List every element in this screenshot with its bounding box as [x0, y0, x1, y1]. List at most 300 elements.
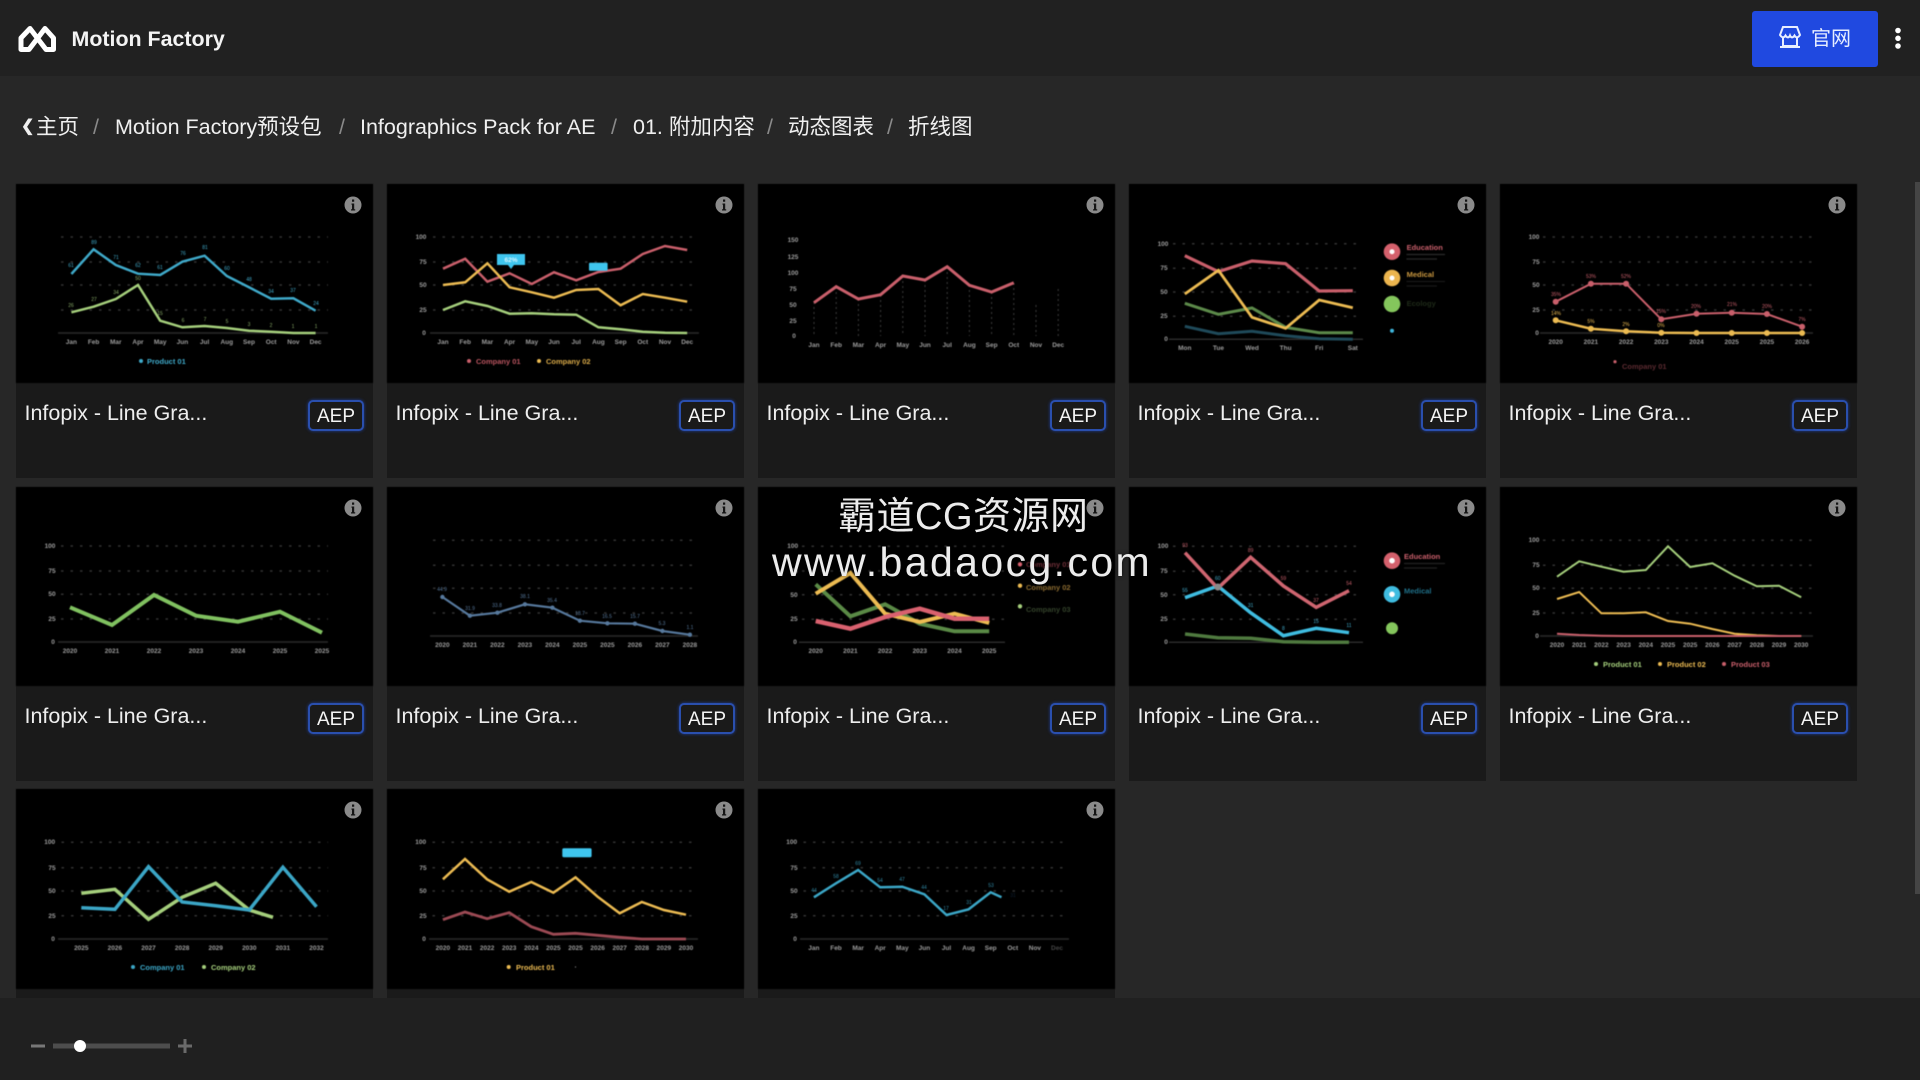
- line chart: single blue series: 50: [790, 888, 798, 895]
- line chart: single green series: 50: [48, 591, 56, 598]
- line chart: product 01: 37: [290, 288, 296, 294]
- line chart: product 01: Dec: [310, 339, 322, 346]
- icon: info: [1458, 196, 1474, 214]
- breadcrumb: 01. 附加内容: [633, 115, 755, 139]
- line chart: single blue series: Feb: [830, 945, 842, 952]
- line chart: companies: [387, 184, 744, 383]
- line chart: company blue and green: 75: [48, 865, 56, 872]
- badge: AEP: AEP: [1059, 406, 1097, 427]
- line chart: companies: 100: [416, 234, 427, 241]
- line chart: single blue series: Dec: [1051, 945, 1063, 952]
- line chart: companies: Feb: [459, 339, 471, 346]
- breadcrumb: Motion Factory预设包: [115, 115, 322, 139]
- line chart: product 01: 7: [204, 317, 207, 323]
- line chart: product yellow and maroon: 2026: [590, 945, 605, 952]
- line chart: education and medical: 54: [1346, 581, 1352, 587]
- line chart: single red series: Aug: [963, 342, 976, 349]
- line chart: weekly with side legend: Education: [1407, 243, 1443, 252]
- line chart: product 01: Jan: [66, 339, 77, 346]
- card 8: [758, 487, 1115, 781]
- line chart: product 01: Aug: [220, 339, 233, 346]
- line chart: product yellow and maroon: 25: [419, 913, 427, 920]
- line chart: education and medical: 93: [1182, 543, 1188, 549]
- line chart: single green series: 2022: [147, 648, 162, 655]
- line chart: single blue series: 69: [855, 861, 861, 867]
- line chart: company blue and green: 2029: [208, 945, 223, 952]
- line chart: companies: 0: [422, 330, 426, 337]
- line chart: weekly with side legend: 25: [1160, 313, 1168, 320]
- icon: info: [344, 802, 362, 818]
- line chart: single green series: 2020: [63, 648, 78, 655]
- line chart: three companies: 100: [787, 543, 799, 550]
- line chart: weekly with side legend: Sat: [1348, 345, 1359, 352]
- line chart: three products: 2020: [1550, 642, 1565, 649]
- line chart: single red series: 125: [788, 254, 799, 261]
- badge: AEP: AEP: [317, 709, 355, 730]
- line chart: product yellow and maroon: Product 01: [516, 963, 555, 972]
- card 7: [387, 487, 744, 781]
- line chart: single green series: 2025: [273, 648, 288, 655]
- line chart: product yellow and maroon: 50: [419, 888, 427, 895]
- card 10: [1500, 487, 1857, 781]
- line chart: single slate series: 31.9: [465, 606, 475, 612]
- line chart: companies: Dec: [681, 339, 694, 346]
- breadcrumb: /: [767, 115, 773, 139]
- line chart: single red series: Jun: [919, 342, 931, 349]
- badge: AEP: AEP: [1801, 406, 1839, 427]
- line chart: company blue and green: 2028: [175, 945, 190, 952]
- icon: info: [1458, 500, 1474, 516]
- line chart: education and medical: 31: [1248, 603, 1254, 609]
- line chart: yearly with markers: 20%: [1691, 304, 1702, 310]
- breadcrumb: /: [887, 115, 893, 139]
- line chart: three products: 2024: [1639, 642, 1653, 649]
- line chart: single green series: 2021: [105, 648, 120, 655]
- badge: AEP: [308, 703, 364, 734]
- line chart: weekly with side legend: 0: [1164, 336, 1168, 343]
- line chart: product 01: 3: [248, 322, 251, 328]
- line chart: single green series: 75: [48, 568, 56, 575]
- line chart: single slate series: 33.8: [492, 603, 502, 609]
- line chart: single red series: 150: [788, 237, 799, 244]
- line chart: product yellow and maroon: [387, 789, 744, 989]
- line chart: single slate series: 2022: [490, 642, 505, 649]
- card 3: [758, 184, 1115, 478]
- line chart: product 01: 50: [135, 276, 141, 282]
- line chart: weekly with side legend: Fri: [1315, 345, 1324, 352]
- line chart: yearly with markers: 53%: [1586, 274, 1597, 280]
- card 12: [387, 789, 744, 1080]
- line chart: single blue series: Aug: [962, 945, 975, 952]
- line chart: yearly with markers: 35%: [1551, 292, 1562, 298]
- line chart: company blue and green: 2031: [276, 945, 291, 952]
- line chart: single green series: 2024: [231, 648, 246, 655]
- line chart: three products: Product 02: [1667, 660, 1706, 669]
- line chart: single green series: 2025: [315, 648, 330, 655]
- line chart: three companies: Company 03: [1026, 605, 1071, 614]
- line chart: three companies: 2020: [808, 648, 823, 655]
- line chart: education and medical: 100: [1158, 543, 1169, 550]
- line chart: yearly with markers: 2026: [1795, 339, 1810, 346]
- breadcrumb: ❮: [21, 118, 34, 135]
- line chart: single blue series: Apr: [875, 945, 886, 952]
- card title: Infopix - Line Gra...: [1138, 704, 1320, 728]
- line chart: product 01: 1: [315, 324, 318, 330]
- line chart: single blue series: 58: [833, 874, 839, 880]
- watermark: [772, 496, 1152, 585]
- line chart: education and medical: 50: [1160, 592, 1168, 599]
- card 5: [1500, 184, 1857, 478]
- line chart: single blue series: Jan: [808, 945, 820, 952]
- card title: Infopix - Line Gra...: [24, 704, 207, 728]
- line chart: yearly with markers: 0: [1535, 330, 1539, 337]
- line chart: company blue and green: 100: [44, 839, 56, 846]
- line chart: single red series: Dec: [1052, 342, 1065, 349]
- line chart: single red series: 0: [792, 333, 796, 340]
- line chart: education and medical: 0: [1164, 639, 1168, 646]
- line chart: three companies: [758, 487, 1115, 686]
- line chart: product 01: Sep: [243, 339, 255, 346]
- line chart: yearly with markers: 2023: [1654, 339, 1669, 346]
- line chart: education and medical: 55: [1182, 588, 1188, 594]
- line chart: weekly with side legend: Wed: [1245, 345, 1259, 352]
- brand name: Motion Factory: [72, 27, 225, 51]
- line chart: single blue series: 47: [899, 877, 905, 883]
- line chart: product 01: 15: [157, 311, 163, 317]
- line chart: three products: 2027: [1727, 642, 1742, 649]
- line chart: three products: Product 03: [1731, 660, 1770, 669]
- icon: store: [1778, 26, 1802, 48]
- line chart: yearly with markers: 14%: [1551, 311, 1562, 317]
- line chart: weekly with side legend: 75: [1160, 265, 1168, 272]
- icon: info: [1086, 802, 1104, 818]
- line chart: weekly with side legend: [1129, 184, 1486, 383]
- line chart: single red series: May: [896, 342, 910, 349]
- line chart: single blue series: Jul: [942, 945, 951, 952]
- icon: info: [716, 500, 732, 516]
- line chart: companies: Oct: [637, 339, 649, 346]
- line chart: three products: 75: [1532, 562, 1540, 569]
- badge: AEP: AEP: [688, 406, 726, 427]
- line chart: company blue and green: 2030: [242, 945, 257, 952]
- card 9: [1129, 487, 1486, 781]
- line chart: single slate series: 38.1: [520, 594, 530, 600]
- line chart: yearly with markers: 2022: [1619, 339, 1634, 346]
- line chart: three companies: 0: [793, 639, 797, 646]
- line chart: three companies: 2024: [947, 648, 962, 655]
- badge: AEP: AEP: [688, 709, 726, 730]
- line chart: yearly with markers: 52%: [1621, 274, 1632, 280]
- line chart: product 01: [16, 184, 373, 383]
- card title: Infopix - Line Gra...: [1508, 401, 1691, 425]
- line chart: single red series: [758, 184, 1115, 383]
- line chart: education and medical: [1129, 487, 1486, 686]
- line chart: product yellow and maroon: 2024: [524, 945, 539, 952]
- line chart: single blue series: Oct: [1007, 945, 1019, 952]
- icon: info: [1828, 500, 1846, 516]
- line chart: product 01: 60: [224, 266, 230, 272]
- line chart: single red series: 50: [789, 302, 797, 309]
- line chart: education and medical: 11: [1346, 623, 1352, 629]
- line chart: single slate series: 5.3: [659, 621, 666, 627]
- card 6: [16, 487, 373, 781]
- line chart: education and medical: 15: [1313, 619, 1319, 625]
- line chart: education and medical: 89: [1248, 548, 1254, 554]
- line chart: product yellow and maroon: 100: [415, 839, 427, 846]
- line chart: three products: 2026: [1705, 642, 1720, 649]
- line chart: three companies: 2021: [843, 648, 858, 655]
- breadcrumb: /: [611, 115, 617, 139]
- line chart: three products: 2030: [1794, 642, 1809, 649]
- badge: AEP: [1792, 703, 1848, 734]
- line chart: three companies: 25: [790, 616, 798, 623]
- line chart: product yellow and maroon: 0: [422, 936, 426, 943]
- card 4: [1129, 184, 1486, 478]
- line chart: single blue series: Mar: [852, 945, 864, 952]
- line chart: single red series: Jan: [808, 342, 820, 349]
- line chart: product 01: 48: [246, 277, 252, 283]
- line chart: product 01: Nov: [287, 339, 300, 346]
- line chart: weekly with side legend: Medical: [1407, 270, 1434, 279]
- card 1: [16, 184, 373, 478]
- line chart: yearly with markers: 50: [1532, 282, 1540, 289]
- line chart: single green series: 100: [45, 543, 56, 550]
- line chart: three products: [1500, 487, 1857, 686]
- badge: AEP: [1792, 400, 1848, 431]
- breadcrumb: 动态图表: [788, 115, 874, 139]
- button: official site: 官网: [1811, 28, 1851, 50]
- line chart: company blue and green: 50: [48, 888, 56, 895]
- line chart: companies: Jul: [571, 339, 581, 346]
- line chart: single slate series: 2020: [435, 642, 450, 649]
- line chart: product yellow and maroon: 2025: [568, 945, 583, 952]
- line chart: single slate series: 2026: [628, 642, 643, 649]
- line chart: single blue series: [758, 789, 1115, 989]
- breadcrumb: /: [93, 115, 99, 139]
- line chart: single red series: Feb: [830, 342, 842, 349]
- line chart: single green series: 0: [51, 639, 55, 646]
- card 2: [387, 184, 744, 478]
- line chart: companies: Company 02: [546, 357, 591, 366]
- line chart: company blue and green: 0: [51, 936, 55, 943]
- icon: info: [716, 802, 732, 818]
- line chart: three companies: 50: [790, 592, 798, 599]
- line chart: companies: 50: [419, 282, 427, 289]
- line chart: single blue series: Jun: [919, 945, 930, 952]
- line chart: product yellow and maroon: 2027: [612, 945, 627, 952]
- card title: Infopix - Line Gra...: [1138, 401, 1320, 425]
- line chart: three products: 2021: [1572, 642, 1587, 649]
- badge: AEP: AEP: [1430, 406, 1468, 427]
- line chart: product 01: 62: [135, 263, 141, 269]
- line chart: three products: 2028: [1750, 642, 1764, 649]
- line chart: education and medical: 75: [1160, 568, 1168, 575]
- line chart: company blue and green: 2032: [309, 945, 324, 952]
- line chart: companies: Jun: [548, 339, 560, 346]
- line chart: education and medical: 37: [1313, 598, 1319, 604]
- line chart: single red series: 75: [789, 286, 797, 293]
- card title: Infopix - Line Gra...: [766, 401, 949, 425]
- line chart: single red series: 25: [789, 318, 797, 325]
- badge: AEP: AEP: [1801, 709, 1839, 730]
- watermark: www.badaocg.com: [772, 539, 1152, 585]
- line chart: company blue and green: 2027: [141, 945, 156, 952]
- card 13: [758, 789, 1115, 1080]
- line chart: yearly with markers: 25: [1532, 307, 1540, 314]
- line chart: single red series: Mar: [853, 342, 865, 349]
- line chart: companies: 75: [419, 259, 427, 266]
- line chart: product yellow and maroon: 2023: [502, 945, 517, 952]
- line chart: product 01: Feb: [88, 339, 99, 346]
- line chart: product 01: 71: [113, 255, 119, 261]
- line chart: education and medical: 59: [1281, 576, 1286, 582]
- line chart: product yellow and maroon: 2025: [546, 945, 561, 952]
- badge: AEP: AEP: [1430, 709, 1468, 730]
- line chart: three products: 25: [1532, 610, 1540, 617]
- line chart: single slate series: 18.7: [575, 611, 585, 617]
- line chart: product 01: 1: [292, 324, 295, 330]
- line chart: companies: Company 01: [476, 357, 521, 366]
- line chart: single blue series: 100: [786, 839, 798, 846]
- breadcrumb: Infographics Pack for AE: [360, 115, 595, 139]
- line chart: single slate series: 16.5: [602, 614, 612, 620]
- breadcrumb: /: [339, 115, 345, 139]
- badge: AEP: AEP: [317, 406, 355, 427]
- line chart: product 01: 24: [313, 301, 319, 307]
- line chart: product yellow and maroon: 2022: [480, 945, 495, 952]
- icon: info: [1086, 500, 1104, 516]
- line chart: yearly with markers: 75: [1532, 259, 1540, 266]
- card title: Infopix - Line Gra...: [396, 401, 578, 425]
- line chart: weekly with side legend: 50: [1160, 289, 1168, 296]
- line chart: weekly with side legend: Mon: [1178, 345, 1192, 352]
- line chart: single blue series: 25: [790, 913, 798, 920]
- line chart: company blue and green: 2026: [108, 945, 123, 952]
- line chart: yearly with markers: 15%: [1656, 309, 1667, 315]
- line chart: product yellow and maroon: 2028: [635, 945, 649, 952]
- card title: Infopix - Line Gra...: [766, 704, 949, 728]
- line chart: product 01: 61: [157, 265, 163, 271]
- line chart: single red series: Jul: [942, 342, 952, 349]
- icon: info: [716, 196, 732, 214]
- footer bar: [0, 998, 1920, 1080]
- line chart: yearly with markers: 20%: [1762, 304, 1773, 310]
- line chart: product 01: 5: [226, 319, 229, 325]
- line chart: yearly with markers: [1500, 184, 1857, 383]
- breadcrumb: [21, 115, 973, 139]
- line chart: weekly with side legend: 100: [1158, 241, 1169, 248]
- zoom slider: [31, 1039, 192, 1053]
- line chart: single slate series: 15.7: [630, 614, 640, 620]
- line chart: three companies: 2025: [982, 648, 997, 655]
- line chart: yearly with markers: 2%: [1622, 322, 1630, 328]
- line chart: three products: 2022: [1594, 642, 1609, 649]
- line chart: single red series: 100: [788, 270, 799, 277]
- line chart: three products: 2025: [1661, 642, 1676, 649]
- badge: AEP: AEP: [1059, 709, 1097, 730]
- line chart: yearly with markers: Company 01: [1622, 362, 1667, 371]
- line chart: education and medical: 8: [1282, 626, 1285, 632]
- line chart: product 01: 26: [68, 303, 74, 309]
- line chart: education and medical: 25: [1160, 616, 1168, 623]
- line chart: yearly with markers: 7%: [1798, 317, 1806, 323]
- line chart: three products: 0: [1535, 633, 1539, 640]
- line chart: product yellow and maroon: 2030: [679, 945, 694, 952]
- line chart: single blue series: 53: [988, 883, 994, 889]
- icon: Motion Factory logo: [18, 26, 56, 52]
- line chart: product 01: 76: [180, 251, 186, 257]
- line chart: product 01: Jun: [177, 339, 188, 346]
- line chart: product 01: May: [154, 339, 167, 346]
- line chart: yearly with markers: 2025: [1724, 339, 1739, 346]
- line chart: product yellow and maroon: 2029: [657, 945, 672, 952]
- line chart: three products: 2025: [1683, 642, 1698, 649]
- line chart: product 01: 6: [182, 318, 185, 324]
- line chart: single slate series: 2025: [600, 642, 615, 649]
- line chart: single slate series: 2027: [655, 642, 670, 649]
- badge: AEP: [1421, 400, 1477, 431]
- line chart: yearly with markers: 2025: [1760, 339, 1775, 346]
- line chart: single blue series: 44: [921, 885, 927, 891]
- line chart: single blue series: Nov: [1029, 945, 1041, 952]
- line chart: three products: 50: [1532, 585, 1540, 592]
- icon: more menu: [1895, 28, 1901, 49]
- icon: info: [1828, 196, 1846, 214]
- line chart: single green series: 25: [48, 616, 56, 623]
- line chart: three companies: 2022: [878, 648, 893, 655]
- line chart: product 01: 89: [91, 240, 97, 246]
- line chart: companies: Jan: [437, 339, 449, 346]
- line chart: single blue series: 75: [790, 865, 798, 872]
- line chart: single slate series: 2024: [545, 642, 560, 649]
- button: official site: [1752, 11, 1878, 67]
- line chart: single slate series: 2023: [518, 642, 533, 649]
- line chart: company blue and green: Company 01: [140, 963, 185, 972]
- line chart: weekly with side legend: Tue: [1213, 345, 1224, 352]
- line chart: single slate series: 2025: [573, 642, 588, 649]
- line chart: companies: 62%: [504, 257, 518, 264]
- line chart: companies: Nov: [659, 339, 672, 346]
- line chart: education and medical: Medical: [1404, 586, 1432, 596]
- line chart: single blue series: May: [896, 945, 909, 952]
- line chart: company blue and green: [16, 789, 373, 989]
- line chart: single slate series: 35.4: [547, 598, 557, 604]
- watermark: 霸道CG资源网: [838, 496, 1089, 538]
- line chart: three companies: Company 02: [1026, 583, 1071, 592]
- line chart: single slate series: [387, 487, 744, 686]
- line chart: single slate series: 44.9: [437, 587, 447, 593]
- line chart: education and medical: Education: [1404, 552, 1441, 561]
- line chart: companies: 25: [419, 307, 427, 314]
- line chart: single green series: 2023: [189, 648, 204, 655]
- line chart: weekly with side legend: Ecology: [1407, 299, 1437, 308]
- line chart: single slate series: 1.1: [687, 625, 694, 631]
- line chart: yearly with markers: 2020: [1548, 339, 1563, 346]
- line chart: companies: Sep: [615, 339, 627, 346]
- line chart: product yellow and maroon: 2021: [458, 945, 473, 952]
- line chart: product 01: Product 01: [147, 357, 186, 366]
- line chart: three products: 2029: [1772, 642, 1787, 649]
- breadcrumb: 主页: [36, 115, 79, 139]
- icon: info: [344, 196, 362, 214]
- card title: Infopix - Line Gra...: [396, 704, 578, 728]
- header bar: [0, 0, 1920, 76]
- line chart: three companies: 75: [790, 568, 798, 575]
- line chart: product 01: 61: [68, 263, 74, 269]
- line chart: company blue and green: 2025: [74, 945, 89, 952]
- line chart: single blue series: Sep: [985, 945, 997, 952]
- line chart: product 01: Mar: [110, 339, 122, 346]
